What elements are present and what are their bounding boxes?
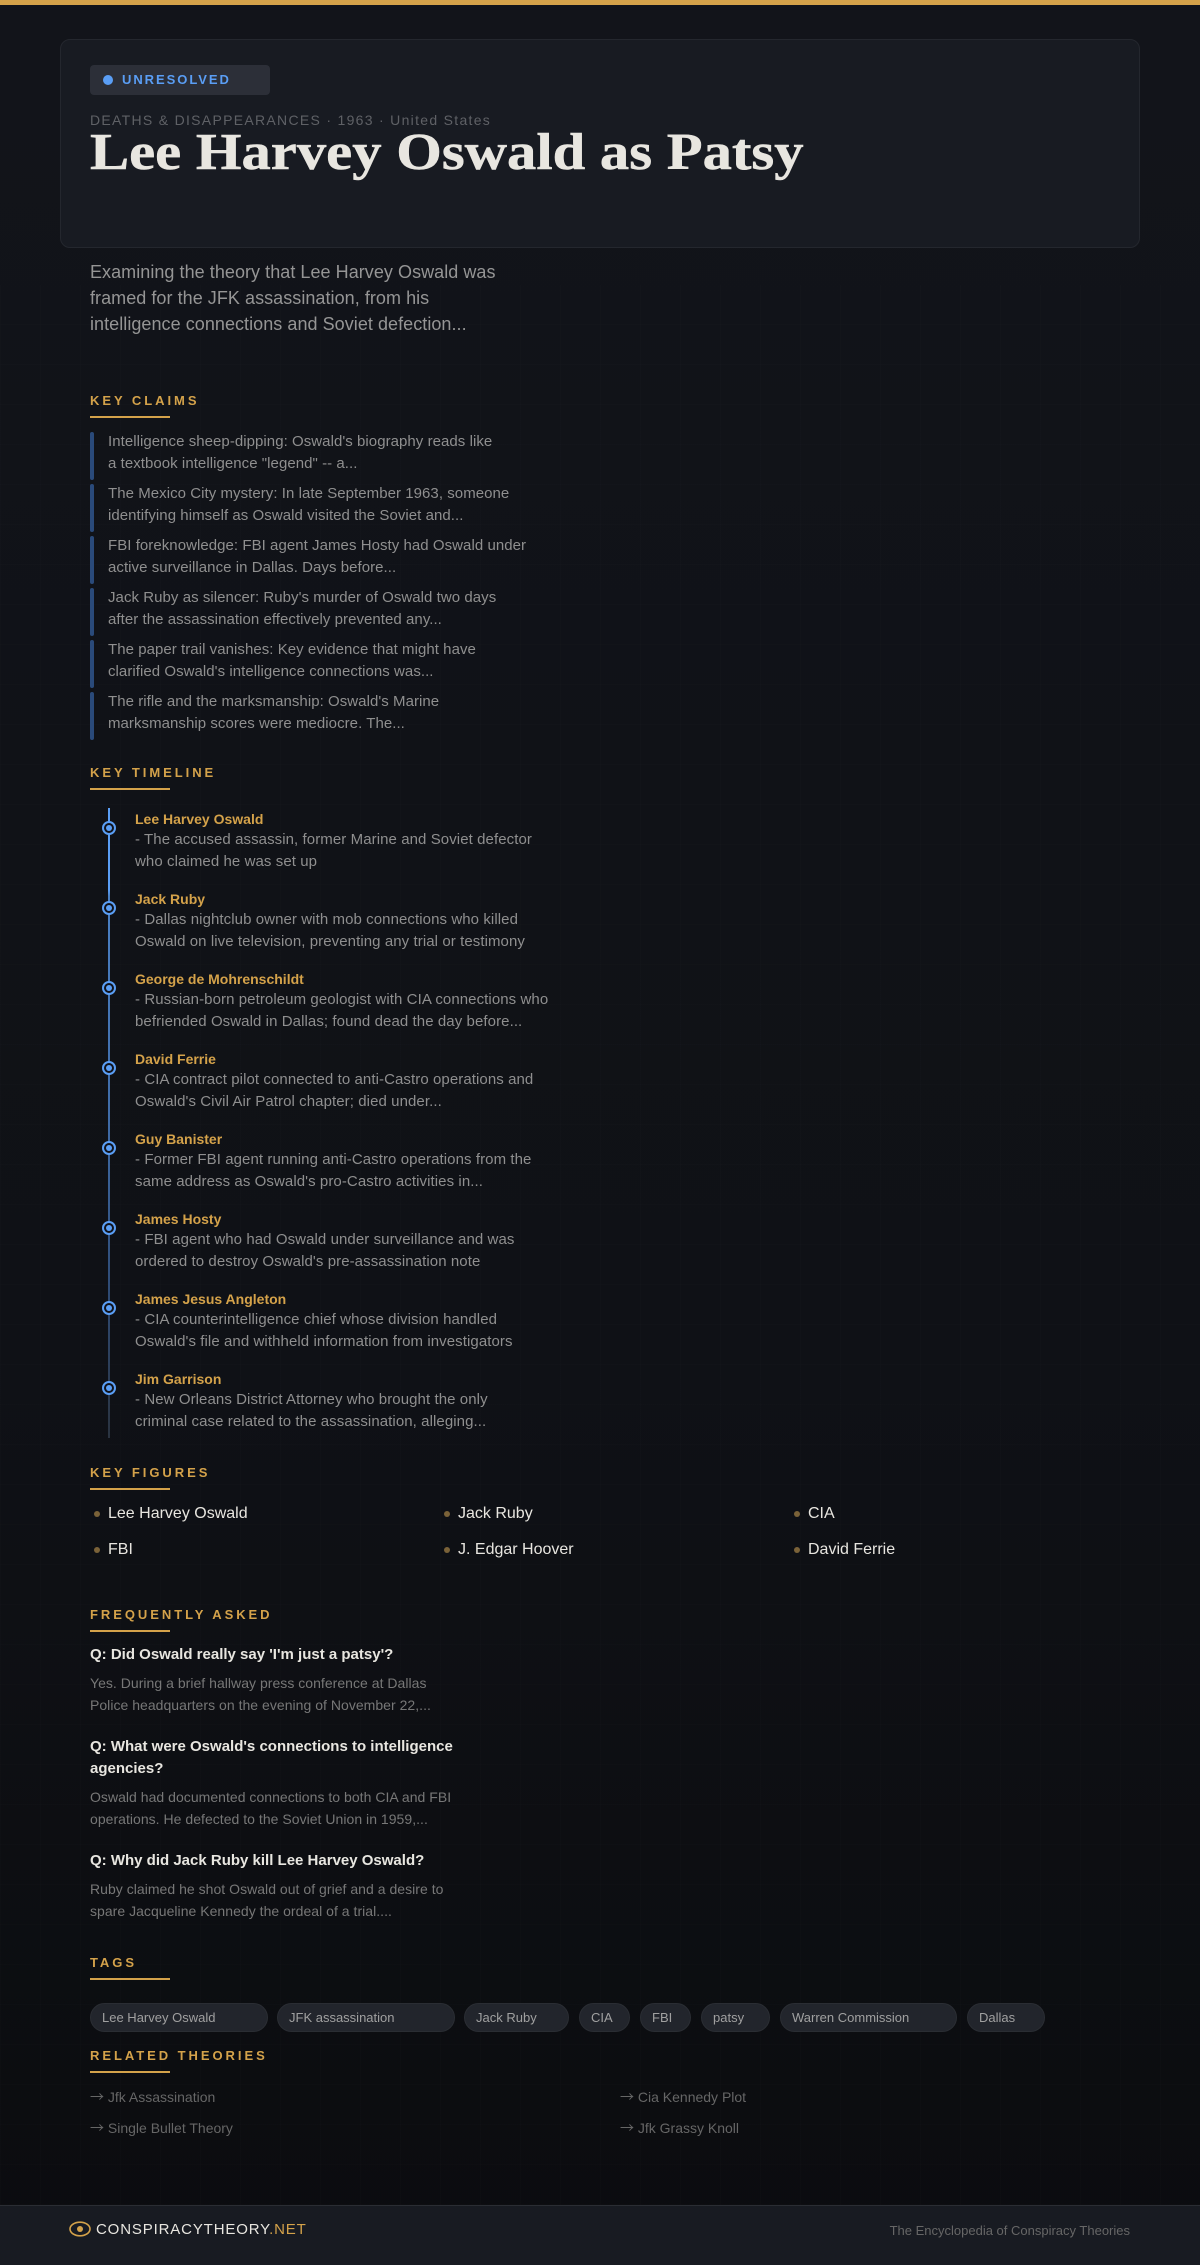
entry: Jack Ruby: - Dallas nightclub owner with mob connections who killed xyxy=(135,911,518,928)
tag: Lee Harvey Oswald xyxy=(90,2003,268,2032)
tagline: framed for the JFK assassination, from his xyxy=(90,288,429,308)
figure: Jack Ruby: Jack Ruby xyxy=(458,1505,533,1522)
figure: FBI xyxy=(94,1541,133,1558)
tagline: Examining the theory that Lee Harvey Oswald was xyxy=(90,262,496,282)
entry: Guy Banister: Guy Banister xyxy=(135,1131,222,1147)
footer xyxy=(0,2205,1200,2265)
tag: Jack Ruby: Jack Ruby xyxy=(476,2010,537,2025)
claim 2: The Mexico City mystery: In late September 1963, someone xyxy=(108,485,509,502)
entry: James Jesus Angleton: - CIA counterintelligence chief whose division handled xyxy=(135,1311,497,1328)
figure: CIA: CIA xyxy=(808,1505,835,1522)
site name: CONSPIRACYTHEORY.NET xyxy=(96,2221,307,2238)
entry: David Ferrie: Oswald's Civil Air Patrol chapter; died under... xyxy=(135,1093,442,1110)
claim 5: The paper trail vanishes: Key evidence that might have xyxy=(108,641,476,658)
entry: David Ferrie: David Ferrie xyxy=(135,1051,216,1067)
figure: Lee Harvey Oswald: Lee Harvey Oswald xyxy=(108,1505,248,1522)
claim 3 xyxy=(90,536,526,584)
top accent bar xyxy=(0,0,1200,5)
claim 1: a textbook intelligence "legend" -- a... xyxy=(108,455,357,472)
footer tagline: The Encyclopedia of Conspiracy Theories xyxy=(890,2223,1130,2238)
tag: FBI xyxy=(640,2003,691,2032)
claim 5 xyxy=(90,640,476,688)
panel: key claims xyxy=(90,393,526,740)
heading: key timeline: KEY TIMELINE xyxy=(90,765,216,780)
tag: JFK assassination: JFK assassination xyxy=(289,2010,394,2025)
entry: Jack Ruby: Jack Ruby xyxy=(135,891,205,907)
heading: key claims: KEY CLAIMS xyxy=(90,393,199,408)
timeline axis xyxy=(108,808,110,1438)
tag: Warren Commission xyxy=(780,2003,957,2032)
panel: key figures xyxy=(90,1465,895,1558)
heading: frequently asked: FREQUENTLY ASKED xyxy=(90,1607,273,1622)
entry: Guy Banister: same address as Oswald's pro-Castro activities in... xyxy=(135,1173,483,1190)
entry: James Jesus Angleton xyxy=(135,1291,513,1350)
faq 2: Oswald had documented connections to both CIA and FBI xyxy=(90,1789,451,1805)
entry: George de Mohrenschildt xyxy=(135,971,548,1030)
entry: Lee Harvey Oswald: who claimed he was set up xyxy=(135,853,317,870)
faq 3: Q: Why did Jack Ruby kill Lee Harvey Oswald? xyxy=(90,1852,424,1869)
heading: related theories: RELATED THEORIES xyxy=(90,2048,268,2063)
entry: Guy Banister xyxy=(135,1131,531,1190)
claim 1: Intelligence sheep-dipping: Oswald's biography reads like xyxy=(108,433,492,450)
panel: frequently asked xyxy=(90,1607,453,1919)
tag: Warren Commission: Warren Commission xyxy=(792,2010,909,2025)
faq 3: spare Jacqueline Kennedy the ordeal of a trial.... xyxy=(90,1903,392,1919)
claim 2: identifying himself as Oswald visited the Soviet and... xyxy=(108,507,463,524)
entry: James Hosty: ordered to destroy Oswald's pre-assassination note xyxy=(135,1253,480,1270)
entry: Jim Garrison: - New Orleans District Attorney who brought the only xyxy=(135,1391,488,1408)
timeline dots xyxy=(102,821,116,1395)
tag: Dallas: Dallas xyxy=(979,2010,1015,2025)
entry: Lee Harvey Oswald: Lee Harvey Oswald xyxy=(135,811,263,827)
panel: related theories xyxy=(90,2048,746,2138)
meta line: DEATHS & DISAPPEARANCES · 1963 · United States xyxy=(90,112,491,128)
figure: FBI: FBI xyxy=(108,1541,133,1558)
entry: George de Mohrenschildt: George de Mohrenschildt xyxy=(135,971,304,987)
entry: James Jesus Angleton: James Jesus Angleton xyxy=(135,1291,286,1307)
entry: Lee Harvey Oswald: - The accused assassin, former Marine and Soviet defector xyxy=(135,831,532,848)
tag: patsy xyxy=(701,2003,770,2032)
figure: J. Edgar Hoover: J. Edgar Hoover xyxy=(458,1541,574,1558)
badge label: UNRESOLVED xyxy=(122,72,231,87)
faq 2: agencies? xyxy=(90,1760,163,1777)
faq 1: Q: Did Oswald really say 'I'm just a patsy'? xyxy=(90,1646,393,1663)
entry: James Hosty xyxy=(135,1211,514,1270)
panel: header card xyxy=(60,39,1140,248)
entry: David Ferrie xyxy=(135,1051,533,1110)
status badge xyxy=(90,65,270,95)
faq 2: Q: What were Oswald's connections to intelligence xyxy=(90,1738,453,1755)
claim 6 xyxy=(90,692,439,740)
entry: Jim Garrison xyxy=(135,1371,488,1430)
entry: George de Mohrenschildt: befriended Oswald in Dallas; found dead the day before... xyxy=(135,1013,522,1030)
panel: tags xyxy=(90,1955,1045,2032)
claim 6: The rifle and the marksmanship: Oswald's Marine xyxy=(108,693,439,710)
entry: James Hosty: - FBI agent who had Oswald under surveillance and was xyxy=(135,1231,514,1248)
claim 2 xyxy=(90,484,509,532)
tag: JFK assassination xyxy=(277,2003,455,2032)
figure: David Ferrie: David Ferrie xyxy=(808,1541,895,1558)
heading: key figures: KEY FIGURES xyxy=(90,1465,210,1480)
tag: FBI: FBI xyxy=(652,2010,672,2025)
tag: Jack Ruby xyxy=(464,2003,569,2032)
claim 3: active surveillance in Dallas. Days before... xyxy=(108,559,396,576)
entry: George de Mohrenschildt: - Russian-born petroleum geologist with CIA connections who xyxy=(135,991,548,1008)
icon: status dot xyxy=(103,75,113,85)
claim 4: after the assassination effectively prevented any... xyxy=(108,611,442,628)
claim 4 xyxy=(90,588,496,636)
entry: James Jesus Angleton: Oswald's file and withheld information from investigators xyxy=(135,1333,513,1350)
figure: CIA xyxy=(794,1505,835,1522)
entry: Jack Ruby: Oswald on live television, preventing any trial or testimony xyxy=(135,933,525,950)
entry: James Hosty: James Hosty xyxy=(135,1211,221,1227)
entry: Jim Garrison: Jim Garrison xyxy=(135,1371,221,1387)
entry: Jim Garrison: criminal case related to the assassination, alleging... xyxy=(135,1413,486,1430)
tagline xyxy=(90,262,496,334)
entry: Lee Harvey Oswald xyxy=(135,811,532,870)
link: Cia Kennedy Plot: → Cia Kennedy Plot xyxy=(620,2087,746,2107)
tag: Dallas xyxy=(967,2003,1045,2032)
faq 1: Yes. During a brief hallway press conference at Dallas xyxy=(90,1675,426,1691)
title: Lee Harvey Oswald as Patsy xyxy=(90,124,804,181)
faq 2: operations. He defected to the Soviet Union in 1959,... xyxy=(90,1811,428,1827)
claim 1 xyxy=(90,432,492,480)
link: Jfk Assassination: → Jfk Assassination xyxy=(90,2087,215,2107)
panel: key timeline xyxy=(90,765,548,1438)
icon: eye logo xyxy=(69,2221,91,2237)
claim 6: marksmanship scores were mediocre. The... xyxy=(108,715,405,732)
tag: CIA xyxy=(579,2003,630,2032)
entry: David Ferrie: - CIA contract pilot connected to anti-Castro operations and xyxy=(135,1071,533,1088)
claim 3: FBI foreknowledge: FBI agent James Hosty had Oswald under xyxy=(108,537,526,554)
claim 5: clarified Oswald's intelligence connections was... xyxy=(108,663,434,680)
link: Single Bullet Theory: → Single Bullet Theory xyxy=(90,2118,233,2138)
faq 2 xyxy=(90,1738,453,1827)
tagline: intelligence connections and Soviet defection... xyxy=(90,314,467,334)
heading: tags: TAGS xyxy=(90,1955,137,1970)
faq 1: Police headquarters on the evening of November 22,... xyxy=(90,1697,431,1713)
faq 3: Ruby claimed he shot Oswald out of grief and a desire to xyxy=(90,1881,443,1897)
tag: patsy: patsy xyxy=(713,2010,744,2025)
claim 4: Jack Ruby as silencer: Ruby's murder of Oswald two days xyxy=(108,589,496,606)
tag: CIA: CIA xyxy=(591,2010,613,2025)
faq 3 xyxy=(90,1852,443,1919)
link: Jfk Grassy Knoll: → Jfk Grassy Knoll xyxy=(620,2118,739,2138)
tag: Lee Harvey Oswald: Lee Harvey Oswald xyxy=(102,2010,215,2025)
faq 1 xyxy=(90,1646,431,1713)
entry: Jack Ruby xyxy=(135,891,525,950)
entry: Guy Banister: - Former FBI agent running anti-Castro operations from the xyxy=(135,1151,531,1168)
